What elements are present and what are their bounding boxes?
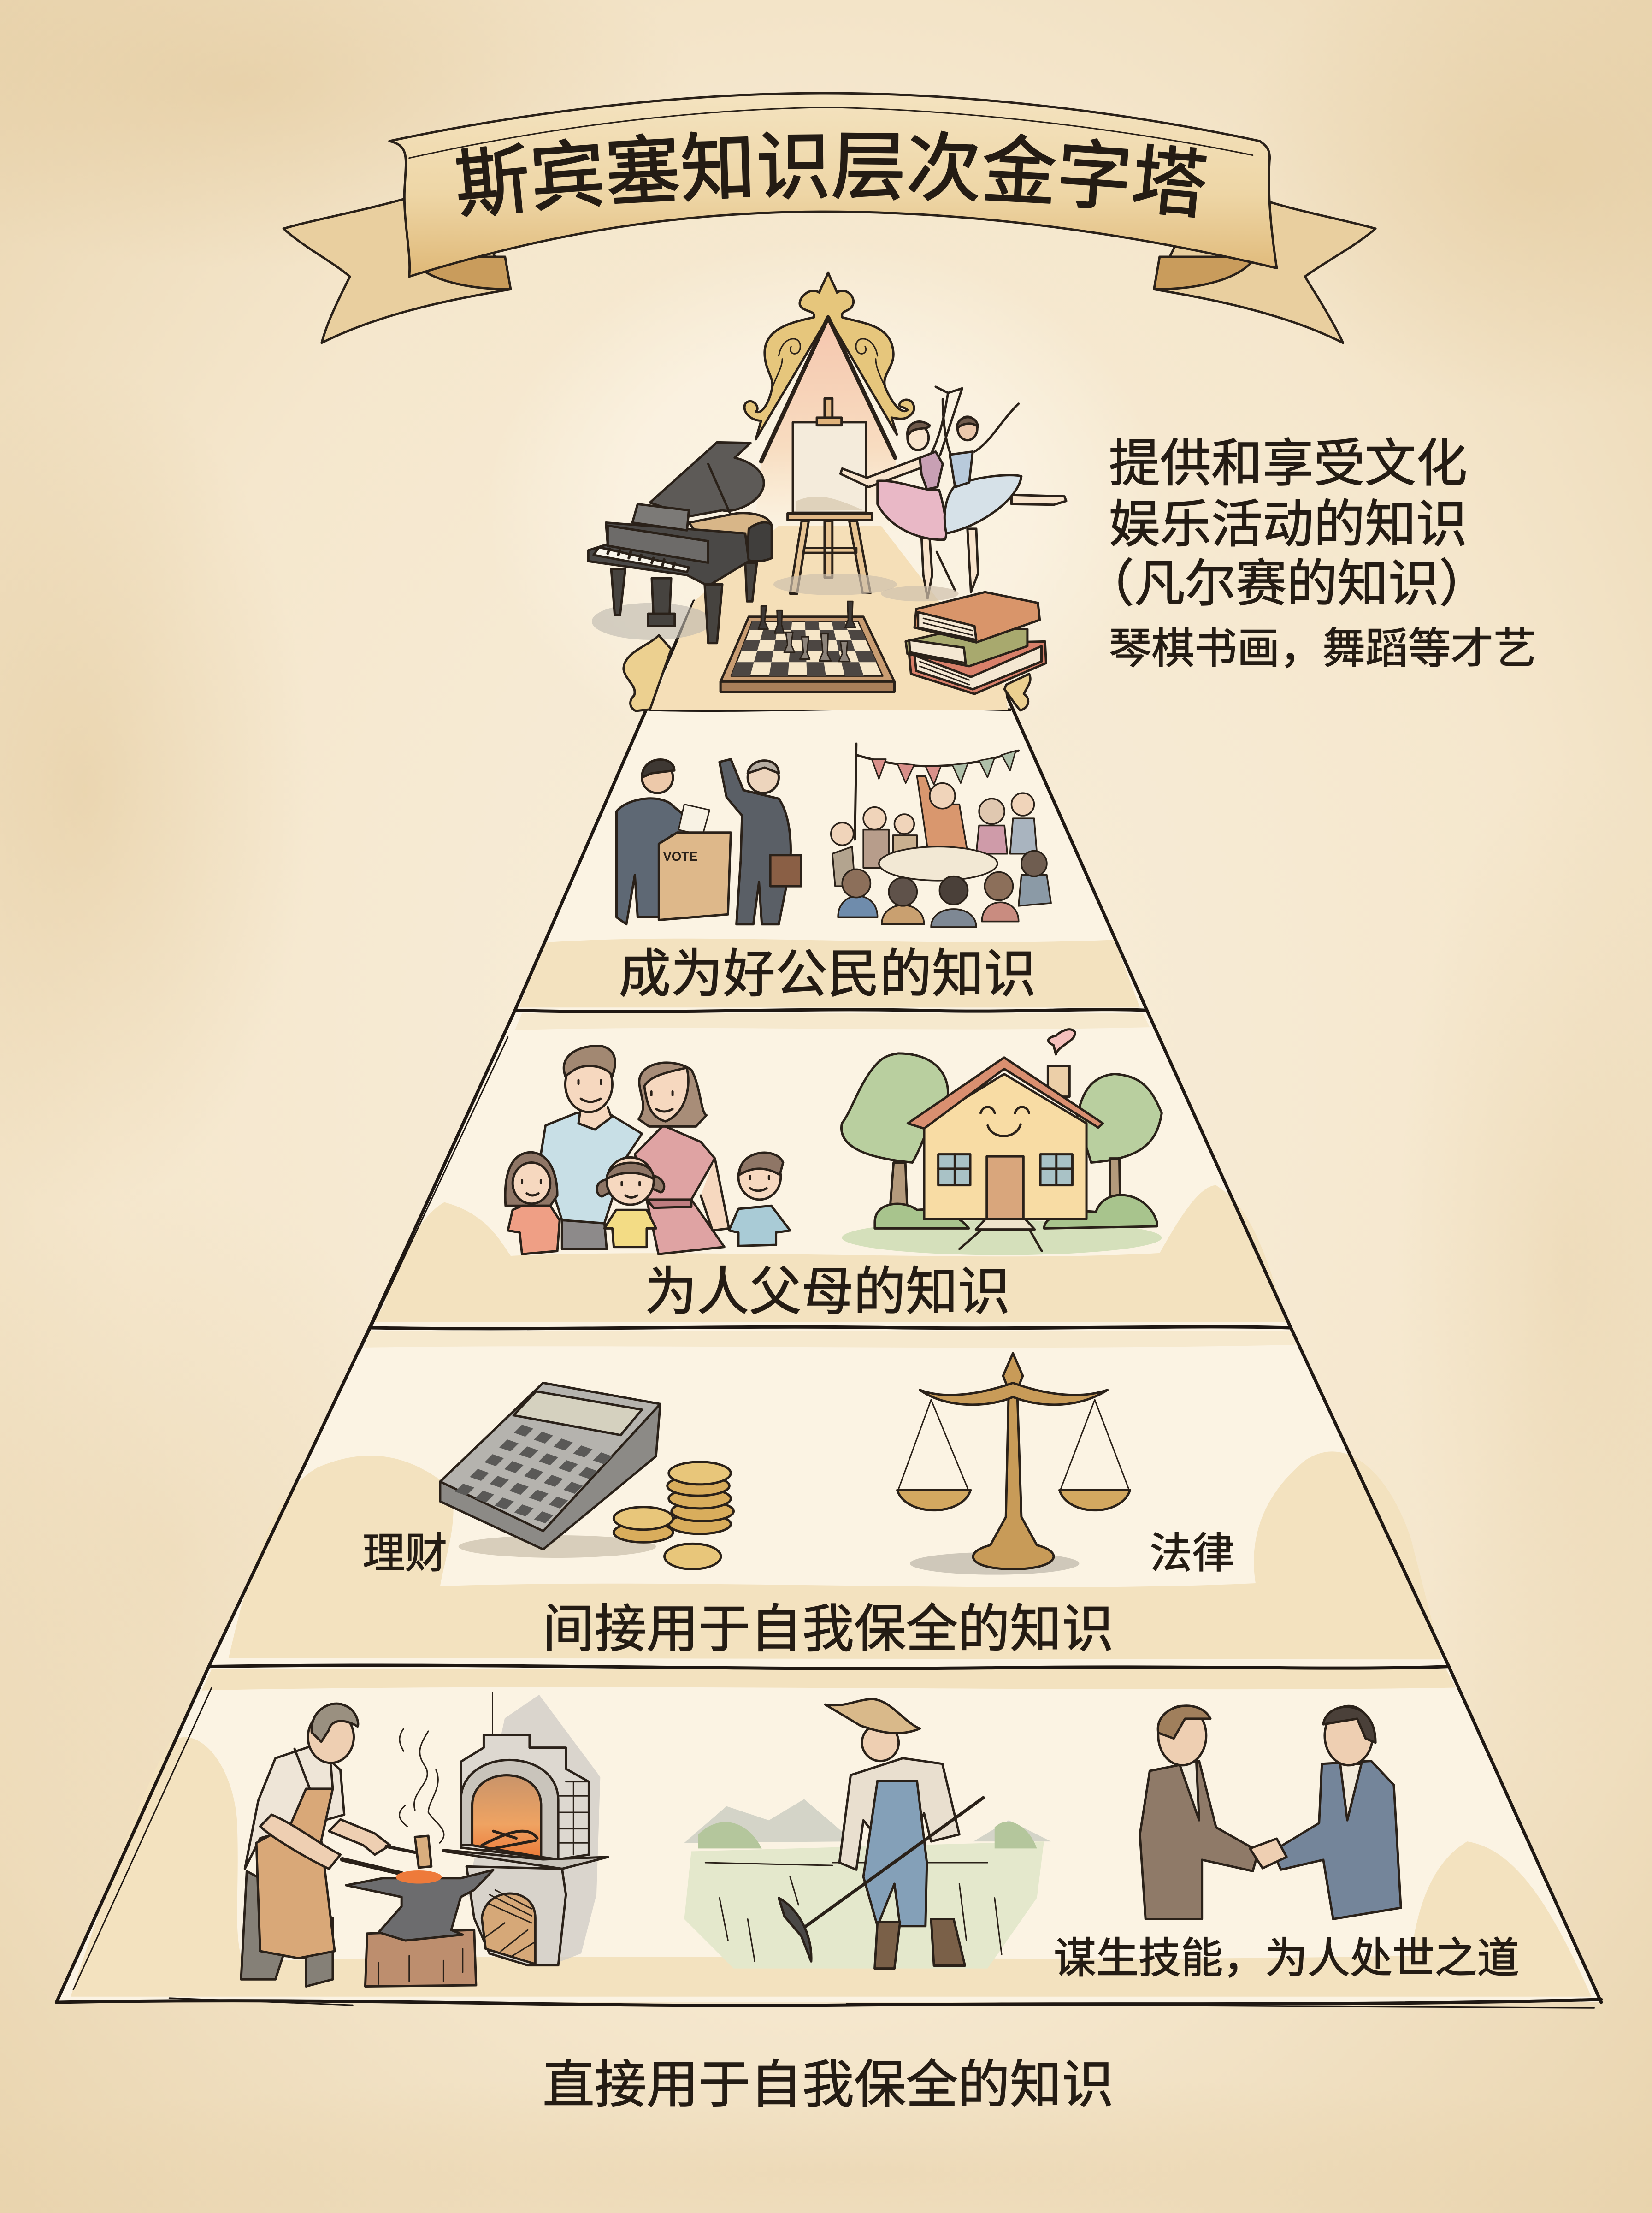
icon: man in blue suit [1250,1706,1401,1919]
icon: calculator [440,1383,660,1558]
father [541,1046,642,1249]
tier 2 label: 成为好公民的知识 [619,945,1036,1003]
girl left [505,1152,560,1254]
icon: lower gold scrolls [624,635,1030,711]
tier 4: finance and law illustration [440,1353,1130,1575]
tier 4 label: 间接用于自我保全的知识 [543,1600,1114,1658]
left ribbon tail [283,197,511,343]
girl center [597,1157,664,1247]
tier 3 label: 为人父母的知识 [645,1262,1010,1320]
title text: 斯宾塞知识层次金字塔 [451,125,1210,228]
label: finance: 理财 [363,1530,447,1577]
icon: heart smoke [1048,1030,1075,1054]
tier 3: family and home illustration [505,1030,1162,1255]
smoke lines [400,1729,444,1843]
mother [635,1063,729,1254]
text block: top tier description: 提供和享受文化 [1109,435,1467,492]
label: livelihood skills: 谋生技能，为人处世之道 [1054,1935,1519,1982]
text block: top tier description: 琴棋书画，舞蹈等才艺 [1109,625,1536,673]
text block: top tier description [1084,435,1536,673]
icon: voter and ballot box [616,760,731,924]
pyramid outline [56,601,1601,2008]
icon: forge [443,1692,608,1965]
icon: candidate with briefcase [720,759,801,924]
pyramid body [56,710,1601,2002]
right ribbon tail [1154,197,1375,343]
icon: community meeting group [831,776,1051,927]
icon: easel with canvas [773,398,897,595]
tier 5: farmer illustration [684,1699,1051,1969]
tier wash patches [71,939,1591,1997]
icon: bunting flags [855,744,1019,840]
icon: voter and ballot box: VOTE [663,849,697,864]
tier 5: blacksmith illustration [241,1692,608,1986]
ribbon folds [409,257,1256,289]
icon: chess board [720,586,959,692]
text block: top tier description: （凡尔赛的知识） [1084,556,1490,612]
tier 1: arts and leisure illustration [588,272,1066,711]
pink triangle glow [754,317,906,532]
icon: family of five [505,1046,790,1254]
icon: ballerina in blue [943,399,1066,592]
ribbon main band [389,93,1277,277]
icon: farmer [779,1699,983,1969]
label: law: 法律 [1150,1530,1234,1577]
icon: grand piano [588,442,772,643]
icon: balance scales [897,1353,1130,1575]
tier 2: civic illustration [616,744,1051,927]
icon: ballerina in pink [840,387,962,598]
icon: stack of books [906,592,1046,694]
handshake [1250,1839,1286,1868]
tier 5: handshake illustration [1140,1706,1401,1919]
boy [729,1153,790,1246]
landscape [684,1799,1051,1969]
label: base tier title: 直接用于自我保全的知识 [543,2055,1114,2113]
icon: gold ornament [744,272,914,439]
icon: smiling house with trees [841,1030,1162,1255]
title banner [283,93,1375,343]
icon: anvil and stump [346,1870,493,1986]
floor wash [650,526,1008,710]
text block: top tier description: 娱乐活动的知识 [1109,495,1467,553]
icon: ornament scrolls and triangle lines [761,317,895,462]
icon: coin stacks [614,1462,734,1569]
icon: man in brown suit [1140,1706,1258,1919]
icon: blacksmith figure [241,1704,431,1986]
